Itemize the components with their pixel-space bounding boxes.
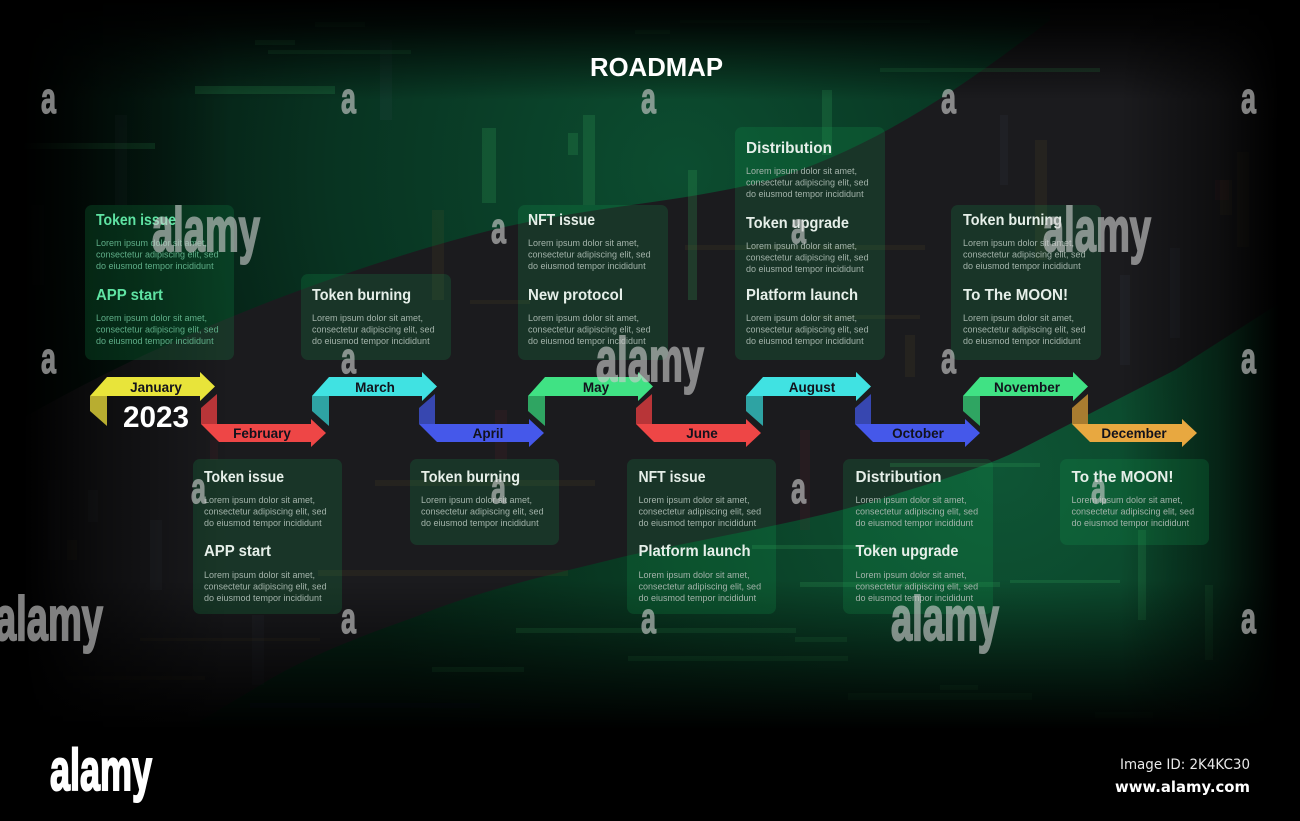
arrow: December: [1072, 394, 1197, 447]
arrow: December: December: [1101, 426, 1167, 441]
panel: January card: consectetur adipiscing elit, sed: [96, 250, 219, 260]
panel: October card: Distribution: [856, 469, 942, 486]
panel: November card: Lorem ipsum dolor sit amet,: [963, 238, 1074, 248]
panel: December card: consectetur adipiscing elit, sed: [1072, 507, 1194, 517]
panel: May card: consectetur adipiscing elit, sed: [528, 325, 651, 335]
watermark: small marks: a: [1091, 464, 1106, 513]
arrow: August: [746, 372, 871, 426]
panel: November card: do eiusmod tempor incididunt: [963, 261, 1081, 271]
panel: May card: consectetur adipiscing elit, sed: [528, 250, 651, 260]
green wave top: [0, 0, 1050, 432]
panel: January card: Lorem ipsum dolor sit amet,: [96, 313, 207, 323]
panel: February card: [193, 459, 342, 614]
panel: October card: do eiusmod tempor incididunt: [856, 518, 974, 528]
panel: March card: Token burning: [312, 287, 411, 304]
panel: August card: Platform launch: [746, 287, 858, 304]
panel: February card: Lorem ipsum dolor sit amet,: [204, 495, 315, 505]
footer image id: Image ID: 2K4KC30: [1120, 757, 1250, 773]
panel: June card: do eiusmod tempor incididunt: [638, 593, 757, 603]
footer url: www.alamy.com: [1115, 778, 1250, 796]
panel: August card: Lorem ipsum dolor sit amet,: [746, 241, 857, 251]
arrow: October: [855, 394, 980, 447]
panel: August card: [735, 127, 885, 360]
panel: August card: do eiusmod tempor incididunt: [746, 189, 864, 199]
watermark: large logos: alamy: [1043, 196, 1151, 265]
panel: February card: consectetur adipiscing elit, sed: [204, 582, 327, 592]
watermark: large logos: alamy: [596, 326, 704, 395]
panel: August card: Token upgrade: [746, 215, 849, 232]
watermark: small marks: a: [341, 74, 356, 123]
panel: June card: [627, 459, 776, 614]
panel: February card: Token issue: [204, 469, 284, 486]
panel: June card: consectetur adipiscing elit, sed: [638, 582, 761, 592]
panel: November card: To The MOON!: [963, 287, 1068, 304]
watermark: small marks: a: [491, 464, 506, 513]
watermark: small marks: a: [641, 74, 656, 123]
watermark: small marks: a: [41, 74, 56, 123]
watermark: small marks: a: [41, 334, 56, 383]
arrow: May: [528, 372, 653, 426]
panel: November card: Token burning: [963, 212, 1062, 229]
vignette: [0, 0, 1300, 100]
panel: October card: Token upgrade: [856, 543, 959, 560]
watermark: small marks: a: [341, 334, 356, 383]
watermark: small marks: a: [1241, 334, 1256, 383]
panel: June card: NFT issue: [638, 469, 706, 486]
panel: January card: Token issue: [96, 212, 176, 229]
panel: June card: Lorem ipsum dolor sit amet,: [638, 570, 750, 580]
panel: August card: Lorem ipsum dolor sit amet,: [746, 313, 857, 323]
panel: December card: do eiusmod tempor incididunt: [1072, 518, 1190, 528]
panel: January card: [85, 205, 234, 360]
arrow: February: [201, 394, 326, 447]
arrow: November: [963, 372, 1088, 426]
panel: May card: Lorem ipsum dolor sit amet,: [528, 313, 639, 323]
footer logo: alamy: [50, 738, 152, 803]
watermark: small marks: a: [1241, 74, 1256, 123]
panel: August card: do eiusmod tempor incididunt: [746, 336, 864, 346]
arrow: February: February: [233, 426, 291, 441]
arrow: April: April: [473, 426, 503, 441]
watermark: large logos: alamy: [152, 196, 260, 265]
panel: November card: [951, 205, 1101, 360]
panel: March card: [301, 274, 451, 360]
panel: January card: APP start: [96, 287, 164, 304]
panel: August card: do eiusmod tempor incididunt: [746, 264, 864, 274]
panel: December card: Lorem ipsum dolor sit amet,: [1072, 495, 1183, 505]
panel: May card: Lorem ipsum dolor sit amet,: [528, 238, 639, 248]
panel: February card: do eiusmod tempor incididunt: [204, 593, 322, 603]
arrow: March: [312, 372, 437, 426]
panel: February card: consectetur adipiscing elit, sed: [204, 507, 327, 517]
watermark: small marks: a: [341, 594, 356, 643]
panel: October card: consectetur adipiscing elit, sed: [856, 507, 978, 517]
panel: August card: Distribution: [746, 140, 832, 157]
arrow: June: [636, 394, 761, 447]
arrow: May: May: [583, 380, 610, 395]
panel: April card: Token burning: [421, 469, 520, 486]
watermark: small marks: a: [641, 594, 656, 643]
panel: May card: [518, 205, 668, 360]
panel: December card: [1060, 459, 1209, 545]
panel: February card: APP start: [204, 543, 272, 560]
panel: May card: do eiusmod tempor incididunt: [528, 261, 646, 271]
panel: June card: do eiusmod tempor incididunt: [638, 518, 757, 528]
arrow: March: March: [355, 380, 395, 395]
panel: March card: do eiusmod tempor incididunt: [312, 336, 430, 346]
watermark: small marks: a: [491, 204, 506, 253]
year label: 2023: [123, 401, 189, 434]
panel: January card: consectetur adipiscing elit, sed: [96, 325, 219, 335]
panel: August card: consectetur adipiscing elit, sed: [746, 178, 869, 188]
panel: April card: Lorem ipsum dolor sit amet,: [421, 495, 532, 505]
watermark: large logos: [0, 196, 1151, 654]
panel: November card: do eiusmod tempor incididunt: [963, 336, 1081, 346]
panel: March card: consectetur adipiscing elit, sed: [312, 325, 435, 335]
panel: January card: do eiusmod tempor incididunt: [96, 336, 214, 346]
panel: October card: do eiusmod tempor incididunt: [856, 593, 974, 603]
panel: April card: consectetur adipiscing elit, sed: [421, 507, 544, 517]
watermark: small marks: a: [941, 334, 956, 383]
panel: April card: [410, 459, 559, 545]
panel: October card: consectetur adipiscing elit, sed: [856, 582, 978, 592]
panel: May card: New protocol: [528, 287, 623, 304]
panel: August card: consectetur adipiscing elit, sed: [746, 325, 869, 335]
panel: June card: Platform launch: [638, 543, 750, 560]
watermark: small marks: [41, 74, 1256, 643]
watermark: large logos: alamy: [891, 585, 999, 654]
panel: November card: consectetur adipiscing elit, sed: [963, 325, 1086, 335]
panel: August card: Lorem ipsum dolor sit amet,: [746, 166, 857, 176]
panel: March card: Lorem ipsum dolor sit amet,: [312, 313, 423, 323]
arrow: October: October: [892, 426, 945, 441]
green wave bottom: [200, 290, 1300, 821]
panel: May card: NFT issue: [528, 212, 595, 229]
arrow: January: [90, 372, 215, 426]
panel: June card: Lorem ipsum dolor sit amet,: [638, 495, 750, 505]
panel: October card: Lorem ipsum dolor sit amet,: [856, 570, 967, 580]
arrow: June: June: [686, 426, 718, 441]
panel: June card: consectetur adipiscing elit, sed: [638, 507, 761, 517]
title: ROADMAP: [590, 54, 723, 82]
watermark: small marks: a: [791, 464, 806, 513]
arrow: November: November: [994, 380, 1061, 395]
arrow: August: August: [789, 380, 836, 395]
panel: October card: Lorem ipsum dolor sit amet,: [856, 495, 967, 505]
watermark: large logos: alamy: [0, 585, 103, 654]
panel: January card: Lorem ipsum dolor sit amet,: [96, 238, 207, 248]
panel: December card: To the MOON!: [1072, 469, 1174, 486]
panel: November card: Lorem ipsum dolor sit amet,: [963, 313, 1074, 323]
watermark: small marks: a: [1241, 594, 1256, 643]
arrow: April: [419, 394, 544, 447]
panel: January card: do eiusmod tempor incididunt: [96, 261, 214, 271]
panel: February card: do eiusmod tempor incididunt: [204, 518, 322, 528]
watermark: small marks: a: [941, 74, 956, 123]
panel: August card: consectetur adipiscing elit, sed: [746, 253, 869, 263]
panel: November card: consectetur adipiscing elit, sed: [963, 250, 1086, 260]
panel: May card: do eiusmod tempor incididunt: [528, 336, 646, 346]
watermark: small marks: a: [191, 464, 206, 513]
panel: October card: [843, 459, 993, 614]
arrow: January: January: [130, 380, 182, 395]
panel: April card: do eiusmod tempor incididunt: [421, 518, 539, 528]
panel: February card: Lorem ipsum dolor sit amet,: [204, 570, 315, 580]
watermark: small marks: a: [791, 204, 806, 253]
